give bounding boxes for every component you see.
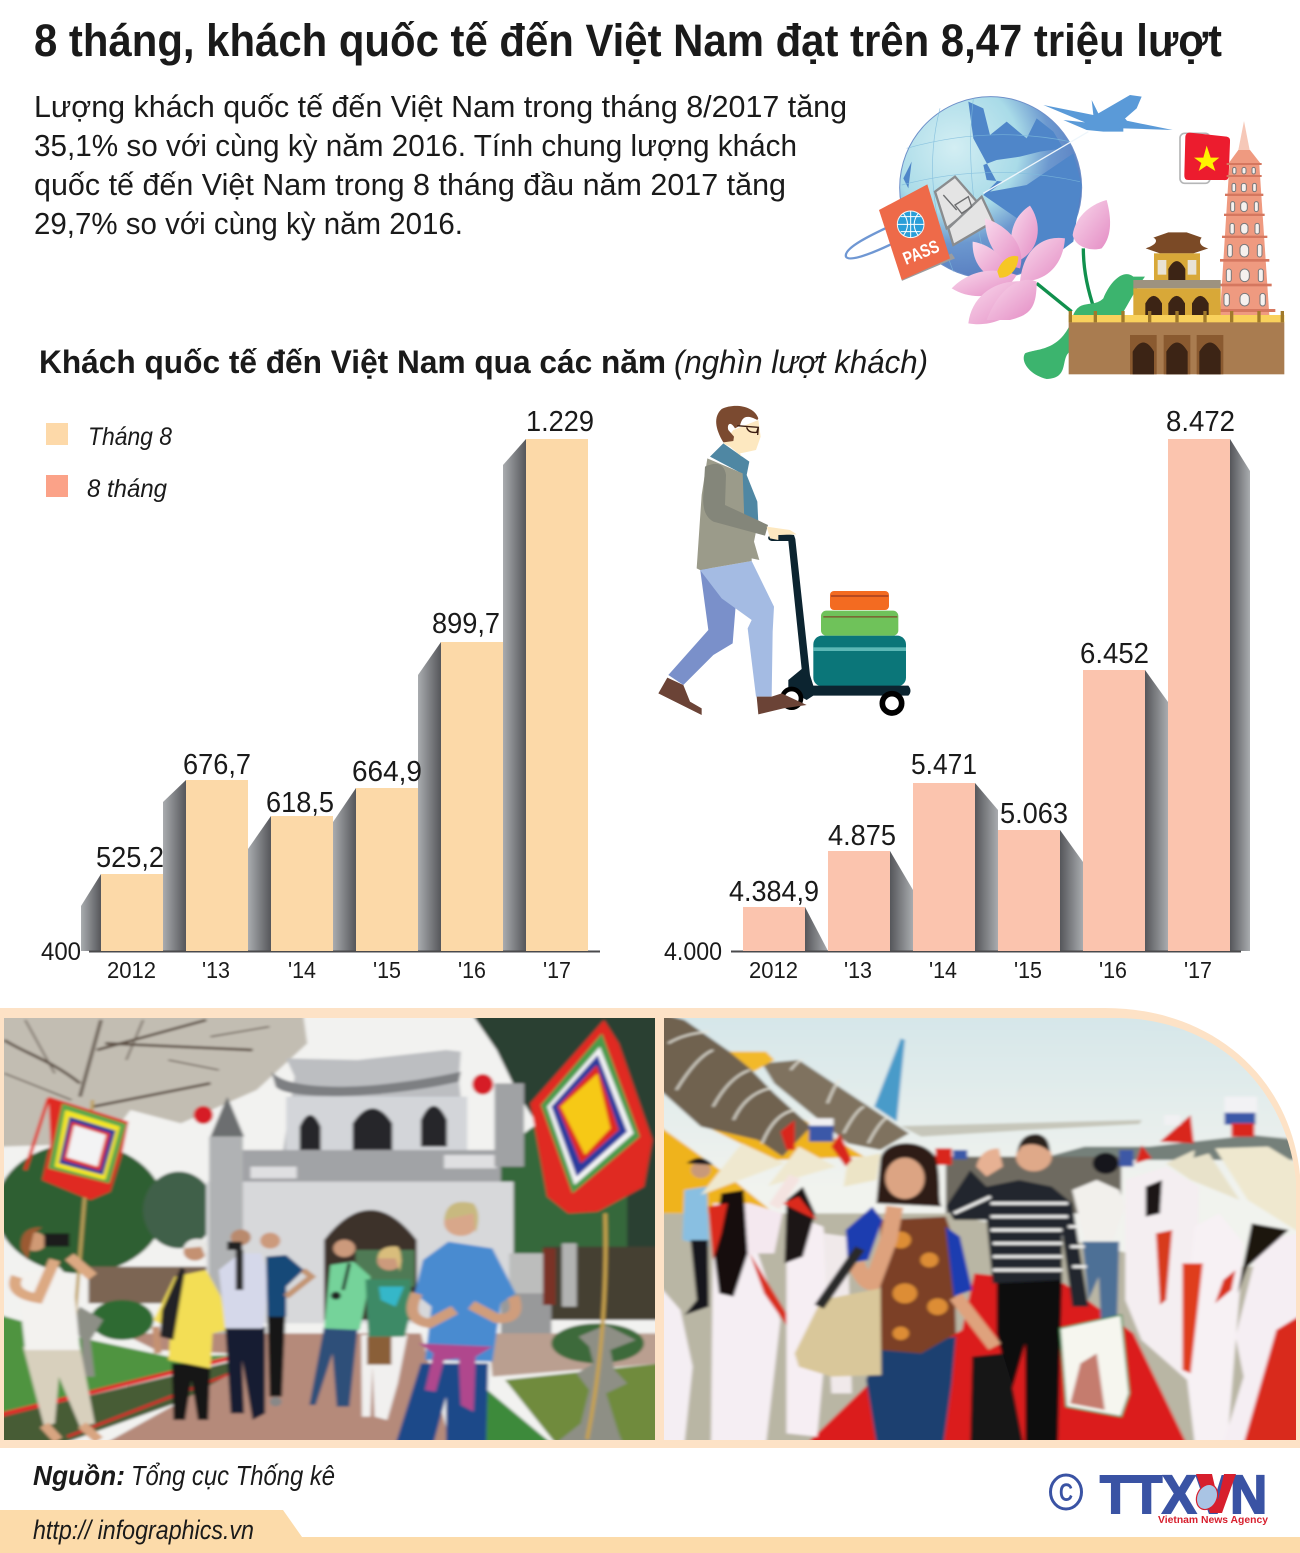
tourist in yellow — [154, 1239, 227, 1420]
aircraft wing — [901, 1120, 1142, 1137]
shopping bag — [1060, 1315, 1129, 1417]
tree canopy — [0, 1013, 307, 1147]
bar chart: Tháng 8: 2012 — [107, 957, 156, 983]
bar chart: Tháng 8: 618,5 — [266, 787, 334, 819]
icon: globe — [900, 97, 1082, 279]
small flags — [780, 1097, 1257, 1167]
illustration: travel and Vietnam landmarks — [846, 95, 1284, 379]
bar chart: 8 tháng: 4.384,9 — [729, 876, 819, 908]
intro text — [34, 89, 847, 241]
bar chart: 8 tháng — [664, 406, 1250, 983]
bar chart: Tháng 8 — [41, 406, 600, 983]
logo: TTXVN: C — [1059, 1479, 1073, 1507]
icon: lotus stems and leaf — [1024, 248, 1145, 379]
icon: citadel upper pavilion — [1133, 232, 1221, 317]
tourist in green — [309, 1240, 370, 1407]
photo: tourists at Temple of Literature — [0, 1013, 661, 1447]
icon: orbit ring — [846, 222, 903, 258]
footer strip — [0, 1510, 1300, 1553]
icon: cart — [768, 534, 910, 713]
icon: passport — [879, 184, 955, 281]
bar chart: Tháng 8: 664,9 — [352, 756, 422, 788]
garden trees — [4, 1018, 655, 1275]
temple gate — [206, 1050, 577, 1337]
icon: passport: PASS — [900, 236, 942, 269]
icon: pagoda tower — [1216, 121, 1275, 315]
left banner — [25, 1097, 128, 1333]
crowd behind — [946, 1157, 1121, 1213]
bar chart: Tháng 8: 1.229 — [526, 406, 594, 438]
bar chart: Tháng 8: 899,7 — [432, 608, 500, 640]
icon: traveller — [658, 406, 807, 715]
guard — [682, 1158, 713, 1315]
bar chart: 8 tháng: '14 — [929, 957, 957, 983]
tourist in navy — [260, 1233, 311, 1406]
chart heading: (nghìn lượt khách) — [674, 344, 928, 380]
ground — [0, 1213, 661, 1443]
black bag — [970, 1353, 1023, 1443]
intro text: quốc tế đến Việt Nam trong 8 tháng đầu năm 2017 tăng — [34, 167, 786, 202]
logo: TTXVN: Vietnam News Agency — [1158, 1514, 1268, 1526]
bar chart: 8 tháng: '17 — [1184, 957, 1212, 983]
icon: lotus centre — [997, 256, 1018, 278]
bar chart: 8 tháng: 5.471 — [911, 749, 977, 781]
tourist in blue polo — [396, 1202, 516, 1443]
icon: Vietnam flag — [1180, 133, 1230, 183]
hills — [1048, 1135, 1300, 1160]
bar chart: 8 tháng: '15 — [1014, 957, 1042, 983]
aircraft tail — [874, 1038, 905, 1122]
bar chart: 8 tháng: 5.063 — [1000, 798, 1068, 830]
icon: citadel base — [1069, 311, 1284, 374]
bar chart: 8 tháng: 6.452 — [1080, 638, 1149, 670]
bar chart: 8 tháng: 8.472 — [1166, 406, 1235, 438]
intro text: 35,1% so với cùng kỳ năm 2016. Tính chung lượng khách — [34, 128, 797, 163]
red carpet — [807, 1273, 1187, 1443]
tourist in floral top — [361, 1246, 412, 1420]
legend — [46, 423, 172, 503]
icon: luggage — [813, 591, 906, 686]
bar chart: Tháng 8: 676,7 — [183, 749, 251, 781]
woman in floral blouse — [846, 1143, 995, 1443]
intro text: 29,7% so với cùng kỳ năm 2016. — [34, 206, 463, 241]
chart heading: Khách quốc tế đến Việt Nam qua các năm — [39, 344, 666, 380]
man in back — [1072, 1153, 1125, 1320]
bar chart: 8 tháng: 4.875 — [828, 820, 896, 852]
airstairs — [660, 1013, 909, 1213]
legend: 8 tháng — [87, 475, 167, 503]
handbag — [795, 1288, 881, 1377]
bar chart: Tháng 8: '14 — [288, 957, 316, 983]
bar chart: Tháng 8: '17 — [543, 957, 571, 983]
right banner — [530, 1020, 652, 1213]
website: http:// infographics.vn — [33, 1515, 254, 1545]
bar chart: 8 tháng: 2012 — [749, 957, 798, 983]
photo frame band — [0, 1008, 1300, 1448]
tourist with camera — [219, 1229, 269, 1420]
icon: airplane — [1043, 95, 1173, 132]
lanterns — [194, 1074, 493, 1124]
bar chart: Tháng 8: 400 — [41, 938, 81, 966]
illustration: traveller with luggage cart — [658, 406, 910, 715]
icon: lotus flower — [952, 200, 1110, 324]
icon: tickets — [935, 177, 993, 245]
ground — [660, 1213, 1300, 1443]
title: 8 tháng, khách quốc tế đến Việt Nam đạt trên 8,47 triệu lượt — [34, 15, 1222, 66]
source: Tổng cục Thống kê — [131, 1460, 335, 1491]
bar chart: Tháng 8: '15 — [373, 957, 401, 983]
photo: welcoming tourists at airport — [660, 1013, 1300, 1447]
intro text: Lượng khách quốc tế đến Việt Nam trong tháng 8/2017 tăng — [34, 89, 847, 124]
bar chart: 8 tháng: '13 — [844, 957, 872, 983]
bar chart: Tháng 8: '16 — [458, 957, 486, 983]
bar chart: 8 tháng: '16 — [1099, 957, 1127, 983]
tourist in white — [15, 1227, 99, 1440]
receiving line right — [1125, 1147, 1300, 1443]
source: Nguồn: — [33, 1460, 125, 1491]
logo: TTXVN: TTXVN — [1100, 1465, 1267, 1525]
receiving line left — [660, 1143, 880, 1443]
man in striped shirt — [946, 1134, 1089, 1443]
source — [33, 1460, 335, 1491]
bar chart: 8 tháng: 4.000 — [664, 938, 722, 966]
legend: Tháng 8 — [88, 423, 172, 451]
bar chart: Tháng 8: 525,2 — [96, 842, 164, 874]
bar chart: Tháng 8: '13 — [202, 957, 230, 983]
